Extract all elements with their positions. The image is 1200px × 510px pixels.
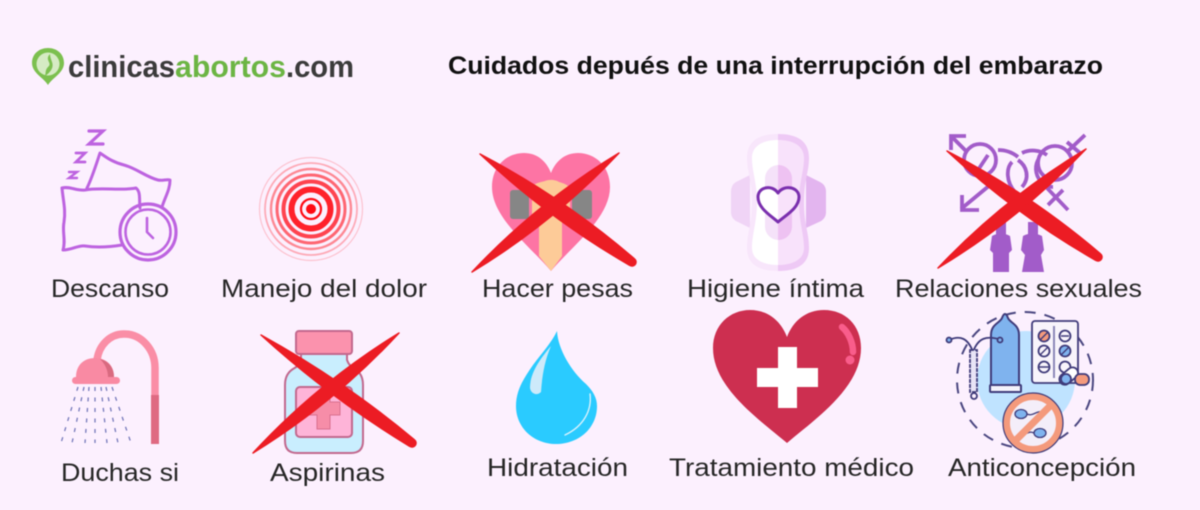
icon: higiene intima, sanitary pad [731, 134, 826, 271]
gender symbols and figures [951, 135, 1085, 272]
icon: hidratacion, water drop [516, 331, 597, 444]
label: Higiene intima: Higiene íntima [687, 275, 864, 303]
icon: anticoncepcion [946, 312, 1093, 453]
logo: clinicasabortos.com: abortos [175, 49, 286, 84]
red cross mark [938, 149, 1102, 268]
label: Relaciones sexuales: Relaciones sexuales [895, 275, 1142, 303]
label: Anticoncepcion: Anticoncepción [948, 454, 1136, 482]
medicine bottle [285, 331, 363, 453]
icon: aspirinas, crossed out [253, 331, 416, 453]
logo: clinicasabortos.com [32, 48, 354, 85]
red cross mark [472, 153, 636, 272]
label: Tratamiento medico: Tratamiento médico [669, 454, 914, 482]
icon: descanso, pillows and clock [62, 131, 176, 260]
label: Descanso: Descanso [51, 275, 169, 303]
title: Cuidados depués de una interrupción del embarazo [448, 52, 1103, 80]
label: Hidratacion: Hidratación [487, 454, 628, 482]
logo: clinicasabortos.com: clinicas [68, 49, 175, 84]
icon: relaciones sexuales, crossed out [938, 135, 1102, 272]
icon: manejo del dolor, target [260, 158, 362, 260]
label: Duchas si: Duchas si [61, 459, 179, 487]
logo: clinicasabortos.com: .com [286, 49, 354, 84]
icon: tratamiento medico, heart with cross [713, 310, 861, 443]
red cross mark [253, 333, 416, 453]
label: Aspirinas: Aspirinas [270, 459, 385, 487]
no sperm sign [1003, 393, 1063, 453]
label: Manejo del dolor: Manejo del dolor [221, 275, 427, 303]
condom [990, 314, 1021, 392]
label: Hacer pesas: Hacer pesas [482, 275, 633, 303]
heart with arm and dumbbell [492, 153, 610, 271]
IUD [946, 338, 1002, 399]
icon: hacer pesas, crossed out [472, 153, 636, 272]
pill pack [1032, 321, 1089, 387]
icon: ducha, shower [61, 334, 159, 444]
